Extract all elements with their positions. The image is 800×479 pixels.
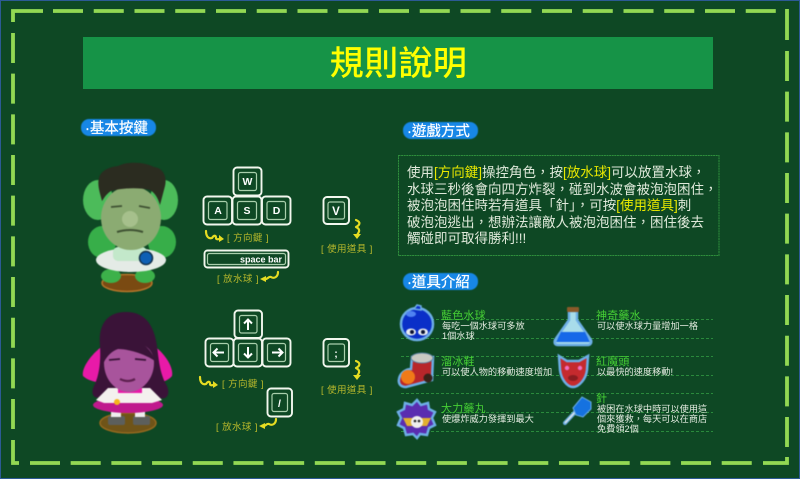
label: direction keys, player two xyxy=(200,377,264,390)
keys: WASD xyxy=(204,168,290,224)
fringe xyxy=(104,339,155,362)
icon: potion flask xyxy=(555,307,591,345)
icon: purple spiked pill xyxy=(398,400,435,438)
label: direction keys, player one: [ 方向鍵 ] xyxy=(227,232,269,244)
label: use item, player two: [ 使用道具 ] xyxy=(321,384,373,396)
icon: blue needle xyxy=(565,397,591,423)
item: magic potion: 可以使水球力量增加一格 xyxy=(597,320,698,331)
key: slash: / xyxy=(278,398,281,410)
character: green player xyxy=(83,163,178,292)
item: red demon head: 紅魔頭 xyxy=(596,354,630,368)
label: use item, player one xyxy=(321,220,373,255)
item: blue balloon: 每吃一個水球可多放 xyxy=(442,320,525,331)
key: space bar: space bar xyxy=(240,254,282,264)
key: V: V xyxy=(332,206,340,218)
label: use item, player two xyxy=(321,361,373,396)
item row guide lines xyxy=(401,320,713,432)
item: magic potion: 神奇藥水 xyxy=(596,308,641,322)
label: drop balloon, player two xyxy=(216,419,276,433)
label: direction keys, player one xyxy=(206,231,269,244)
keys: WASD: D xyxy=(273,205,281,217)
blouse xyxy=(96,388,162,403)
item: needle: 個來獲救，每天可以在商店 xyxy=(597,413,707,424)
base xyxy=(102,274,152,292)
panel: how to play text xyxy=(398,156,719,256)
title banner xyxy=(83,37,713,89)
face xyxy=(101,186,161,250)
base xyxy=(100,413,156,433)
keys: WASD: S xyxy=(243,205,251,217)
label: drop balloon, player one: [ 放水球 ] xyxy=(217,273,259,285)
panel: how to play text: 被泡泡困住時若有道具「針」，可按[使用道具]刺 xyxy=(407,197,691,213)
item: blue balloon xyxy=(401,305,525,341)
skirt xyxy=(93,397,163,413)
arms xyxy=(83,180,113,220)
label: use item, player one: [ 使用道具 ] xyxy=(321,243,373,255)
blue gem xyxy=(140,252,152,264)
item: ice shoes: 溜冰鞋 xyxy=(441,354,475,368)
keys: WASD: A xyxy=(214,205,222,217)
facial features xyxy=(109,359,146,360)
item: power pill: 大力藥丸 xyxy=(441,401,486,415)
item: blue balloon: 藍色水球 xyxy=(441,308,486,322)
item: red demon head xyxy=(559,354,673,387)
key: space bar xyxy=(204,250,288,268)
key: semicolon: ; xyxy=(334,348,338,360)
panel: how to play text: 水球三秒後會向四方炸裂，碰到水波會被泡泡困住， xyxy=(407,182,718,197)
item: ice shoes xyxy=(399,353,552,387)
panel: how to play text: 破泡泡逃出，想辦法讓敵人被泡泡困住，困住後去 xyxy=(407,214,704,230)
keys: WASD: W xyxy=(243,176,253,188)
section label: items: ·道具介紹 xyxy=(407,274,470,291)
key: V xyxy=(324,197,349,224)
item: power pill xyxy=(398,400,534,438)
item: needle xyxy=(565,391,707,434)
pink wings xyxy=(83,345,110,383)
label: drop balloon, player two: [ 放水球 ] xyxy=(216,421,258,433)
icon: red shoe xyxy=(399,353,433,387)
keys: arrows xyxy=(206,310,290,366)
item: needle: 免費領2個 xyxy=(597,423,639,434)
shoes xyxy=(108,416,125,425)
title: 規則說明 xyxy=(330,45,467,83)
item: blue balloon: 1個水球 xyxy=(442,330,475,341)
panel: how to play text: 觸碰即可取得勝利!!! xyxy=(407,230,526,246)
facial features xyxy=(111,206,150,208)
character: pink player xyxy=(83,312,172,433)
item: red demon head: 以最快的速度移動! xyxy=(597,366,673,377)
item: needle: 針 xyxy=(596,391,607,405)
section label: basic keys: ·基本按鍵 xyxy=(85,120,148,137)
icon: demon head xyxy=(559,356,588,387)
key: slash xyxy=(268,388,292,416)
hair xyxy=(98,163,166,205)
item: magic potion xyxy=(555,307,698,345)
feet xyxy=(101,269,121,283)
label: drop balloon, player one xyxy=(217,272,278,285)
skirt xyxy=(96,248,166,272)
section label: how to play: ·遊戲方式 xyxy=(407,123,470,140)
icon: blue balloon xyxy=(401,305,433,340)
item: needle: 被困在水球中時可以使用這 xyxy=(597,403,707,414)
item: power pill: 使爆炸威力發揮到最大 xyxy=(442,413,534,424)
face xyxy=(104,342,154,392)
panel: how to play text: 使用[方向鍵]操控角色，按[放水球]可以放置水球， xyxy=(407,164,706,180)
label: direction keys, player two: [ 方向鍵 ] xyxy=(222,378,264,390)
key: semicolon xyxy=(324,339,349,366)
hair xyxy=(92,312,168,398)
item: ice shoes: 可以使人物的移動速度增加 xyxy=(442,366,552,377)
